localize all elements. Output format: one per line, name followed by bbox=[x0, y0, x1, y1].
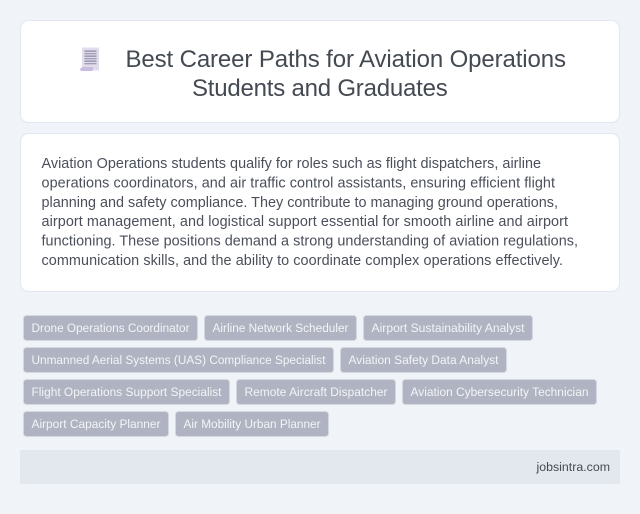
tag bbox=[176, 412, 328, 436]
tag bbox=[402, 380, 596, 404]
text block: description paragraph bbox=[42, 156, 578, 269]
text block: description paragraph: airport management, and logistical support essential for smooth airline and airport bbox=[42, 214, 568, 230]
text block: description paragraph: functioning. These positions demand a strong understanding of aviation regulations, bbox=[42, 234, 578, 250]
tag: Aviation Safety Data Analyst bbox=[348, 353, 499, 367]
text block: description paragraph: Aviation Operations students qualify for roles such as flight dispatchers, airline bbox=[42, 156, 541, 172]
tag: Aviation Cybersecurity Technician bbox=[410, 385, 589, 399]
tag: Airport Capacity Planner bbox=[32, 417, 160, 431]
text block: description paragraph: communication skills, and the ability to coordinate complex operations effectively. bbox=[42, 253, 563, 269]
tag: Airport Sustainability Analyst bbox=[372, 321, 525, 335]
footer source text: jobsintra.com bbox=[535, 460, 610, 474]
tag bbox=[24, 316, 198, 340]
tag: Unmanned Aerial Systems (UAS) Compliance Specialist bbox=[32, 353, 326, 367]
footer bar bbox=[20, 450, 620, 484]
tag: Flight Operations Support Specialist bbox=[32, 385, 222, 399]
tag bbox=[236, 380, 396, 404]
tag bbox=[364, 316, 532, 340]
text block: description paragraph: planning and safety compliance. They contribute to managing ground operations, bbox=[42, 195, 558, 211]
tag: Remote Aircraft Dispatcher bbox=[244, 385, 388, 399]
tag: Drone Operations Coordinator bbox=[32, 321, 190, 335]
text block: description paragraph: operations coordinators, and air traffic control assistants, ensuring efficient flight bbox=[42, 175, 555, 191]
tag: Air Mobility Urban Planner bbox=[184, 417, 320, 431]
tag: Airline Network Scheduler bbox=[212, 321, 348, 335]
tag bbox=[340, 348, 506, 372]
panel: description bbox=[20, 134, 620, 292]
icon: paper scroll document bbox=[80, 48, 99, 71]
heading: Students and Graduates bbox=[192, 75, 448, 102]
tag bbox=[24, 348, 334, 372]
tag bbox=[204, 316, 356, 340]
tag bbox=[24, 412, 168, 436]
tag list: career paths bbox=[24, 316, 596, 436]
heading bbox=[126, 46, 566, 102]
heading: Best Career Paths for Aviation Operations bbox=[126, 46, 566, 73]
panel: title card bbox=[20, 20, 620, 122]
tag bbox=[24, 380, 230, 404]
